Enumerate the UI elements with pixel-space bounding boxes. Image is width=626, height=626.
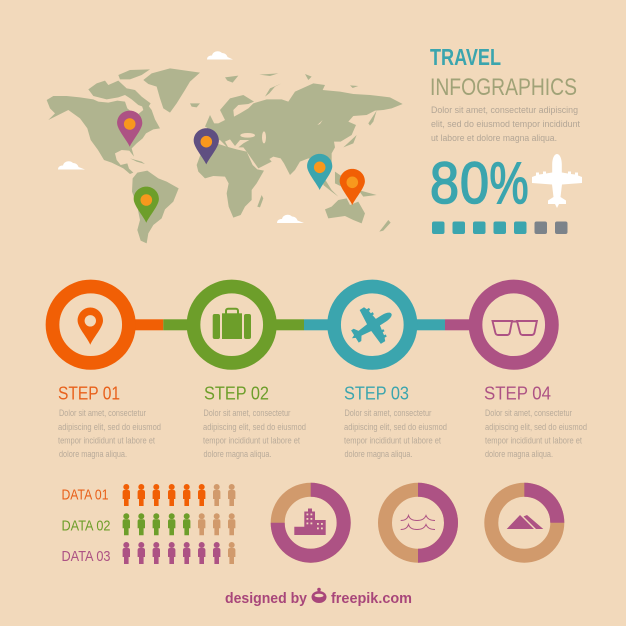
step 1 text: tempor incididunt ut labore et bbox=[58, 436, 155, 446]
cloud: top bbox=[207, 51, 233, 60]
step 3 text: STEP 03 bbox=[344, 382, 409, 404]
step 2 text bbox=[203, 382, 306, 459]
step 4 ring with glasses icon bbox=[476, 286, 552, 363]
progress squares bbox=[432, 222, 568, 234]
data row 3 bbox=[62, 542, 235, 565]
step 1 text: dolore magna aliqua. bbox=[59, 449, 127, 459]
statistic: 80%: 8 bbox=[430, 151, 459, 216]
cloud: left bbox=[58, 161, 85, 170]
step 3 text: Dolor sit amet, consectetur bbox=[344, 408, 432, 418]
map: Americas north and Greenland bbox=[47, 68, 200, 174]
step 2 text: Dolor sit amet, consectetur bbox=[204, 408, 290, 418]
map: Eurasia bbox=[205, 73, 403, 175]
step 3 text bbox=[344, 382, 447, 459]
data row 1 bbox=[62, 484, 235, 506]
timeline connectors bbox=[125, 319, 480, 330]
intro text: elit, sed do eiusmod tempor incididunt bbox=[431, 119, 580, 130]
step 3 text: tempor incididunt ut labore et bbox=[344, 436, 441, 446]
step 1 text: adipiscing elit, sed do eiusmod bbox=[58, 422, 161, 432]
step 4 text: adipiscing elit, sed do eiusmod bbox=[485, 422, 587, 432]
step 2 ring with suitcase icon bbox=[194, 286, 270, 363]
step 4 text bbox=[484, 382, 587, 459]
intro text: Dolor sit amet, consectetur adipiscing bbox=[431, 105, 578, 116]
step 2 text: tempor incididunt ut labore et bbox=[203, 436, 300, 446]
step 4 text: Dolor sit amet, consectetur bbox=[485, 408, 572, 418]
step 1 ring with pin icon bbox=[52, 286, 129, 363]
step 2 text: adipiscing elit, sed do eiusmod bbox=[203, 422, 306, 432]
footer credit: freepik.com bbox=[331, 590, 412, 607]
donut 2: 50% with waves icon bbox=[385, 490, 451, 556]
step 2 text: dolore magna aliqua. bbox=[204, 449, 272, 459]
step 4 text: dolore magna aliqua. bbox=[485, 449, 553, 459]
intro text bbox=[431, 105, 580, 144]
step 3 text: adipiscing elit, sed do eiusmod bbox=[344, 422, 447, 432]
step 3 text: dolore magna aliqua. bbox=[344, 449, 412, 459]
step 1 text bbox=[58, 382, 161, 459]
intro text: ut labore et dolore magna aliqua. bbox=[431, 133, 557, 144]
step 3 ring with plane icon bbox=[334, 286, 410, 363]
icon: white plane bbox=[532, 154, 582, 208]
donut 3: 25% with mountains icon bbox=[491, 490, 557, 556]
map pin: navy, Africa bbox=[194, 128, 219, 164]
world map bbox=[47, 68, 403, 243]
data row 2 bbox=[62, 513, 235, 535]
step 4 text: tempor incididunt ut labore et bbox=[485, 436, 582, 446]
statistic: 80%: 0 bbox=[460, 151, 489, 216]
data row 3: DATA 03 bbox=[62, 548, 110, 565]
step 4 text: STEP 04 bbox=[484, 382, 551, 404]
footer credit: designed by bbox=[225, 590, 308, 607]
map pin: teal, Asia bbox=[307, 154, 332, 190]
map pin: green, South America bbox=[134, 187, 159, 223]
icon: freepik logo bbox=[312, 588, 326, 603]
map: southern continents bbox=[132, 143, 391, 243]
map pin: magenta, North America bbox=[117, 111, 142, 147]
title bbox=[430, 44, 577, 101]
step 1 text: STEP 01 bbox=[58, 382, 120, 404]
data row 2: DATA 02 bbox=[62, 518, 110, 535]
donut 1: 75% with city icon bbox=[278, 490, 344, 556]
data row 1: DATA 01 bbox=[62, 486, 108, 503]
map pin: orange, Australia bbox=[340, 169, 365, 205]
step 1 text: Dolor sit amet, consectetur bbox=[59, 408, 146, 418]
title: TRAVEL bbox=[430, 44, 501, 70]
step 2 text: STEP 02 bbox=[204, 382, 269, 404]
statistic: 80%: % bbox=[490, 151, 528, 216]
cloud: bottom bbox=[277, 215, 304, 223]
footer credit bbox=[225, 588, 412, 607]
title: INFOGRAPHICS bbox=[430, 74, 577, 101]
